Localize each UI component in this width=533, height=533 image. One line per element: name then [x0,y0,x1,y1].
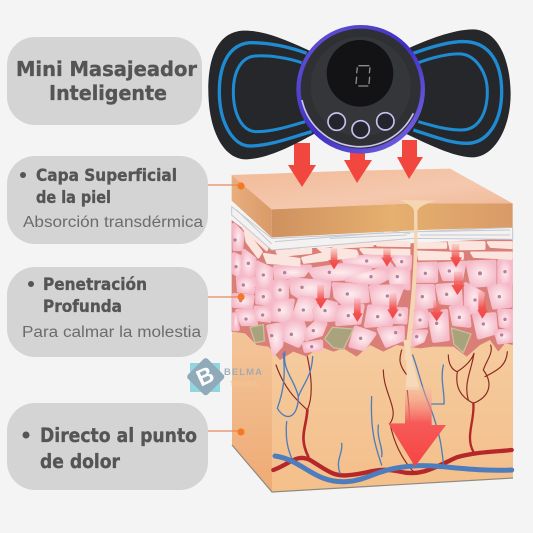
panel: penetración profunda: Profunda [43,297,122,316]
white stratum layer [232,207,513,250]
veins [277,352,444,473]
heading: directo: Directo al punto [40,424,197,447]
basal olive cells [250,325,471,353]
connectors [208,182,245,436]
left skin band [232,175,272,237]
top skin face [232,169,513,209]
arteries [273,450,512,475]
base tissue left side [232,320,272,492]
small penetration arrows [315,244,488,322]
flat upper cells [243,220,511,265]
watermark logo: TIENDA [230,381,258,388]
skin cube illustration [232,169,513,492]
panel: directo al punto: de dolor [40,450,120,473]
connector 2 [208,293,245,301]
control hub [296,25,425,154]
text: absorción: Absorción transdérmica [23,214,203,231]
dermis background [232,220,513,360]
arrow 2 [344,150,372,183]
base tissue front [272,330,513,492]
display screen [327,40,393,107]
right wing [405,29,511,157]
heading: capa superficial: Capa Superficial [36,166,177,185]
panel: penetración profunda [7,267,208,357]
hair follicle [400,200,437,360]
panel: capa superficial [7,156,208,244]
left wing [208,31,315,159]
arrow 1 [288,143,316,187]
front skin band [272,203,513,237]
logo wordmark: BELMA [224,367,262,378]
hair root lower [403,340,420,390]
cell nuclei [233,238,507,348]
panel: directo al punto [7,403,208,490]
skin layers [232,169,513,360]
connector 3 [208,428,245,436]
arrows from device to skin [288,140,423,187]
heading: penetración: Penetración [43,275,147,294]
watermark logo: B [192,361,218,391]
button center [352,121,369,138]
button left [328,113,345,130]
arrow 3 [397,140,423,179]
panel: capa superficial: de la piel [36,188,111,207]
panel: title: Inteligente [49,81,167,105]
connector 1 [208,182,245,190]
watermark logo [186,357,262,397]
big arrow [388,387,446,467]
panel: title [7,37,202,125]
text: para calmar: Para calmar la molestia [22,324,201,341]
button right [377,113,394,130]
display digit [356,66,370,86]
massager device [208,25,511,159]
epidermis cells [234,225,511,353]
heading: product name: Mini Masajeador [16,57,197,81]
blood vessels [273,345,512,482]
